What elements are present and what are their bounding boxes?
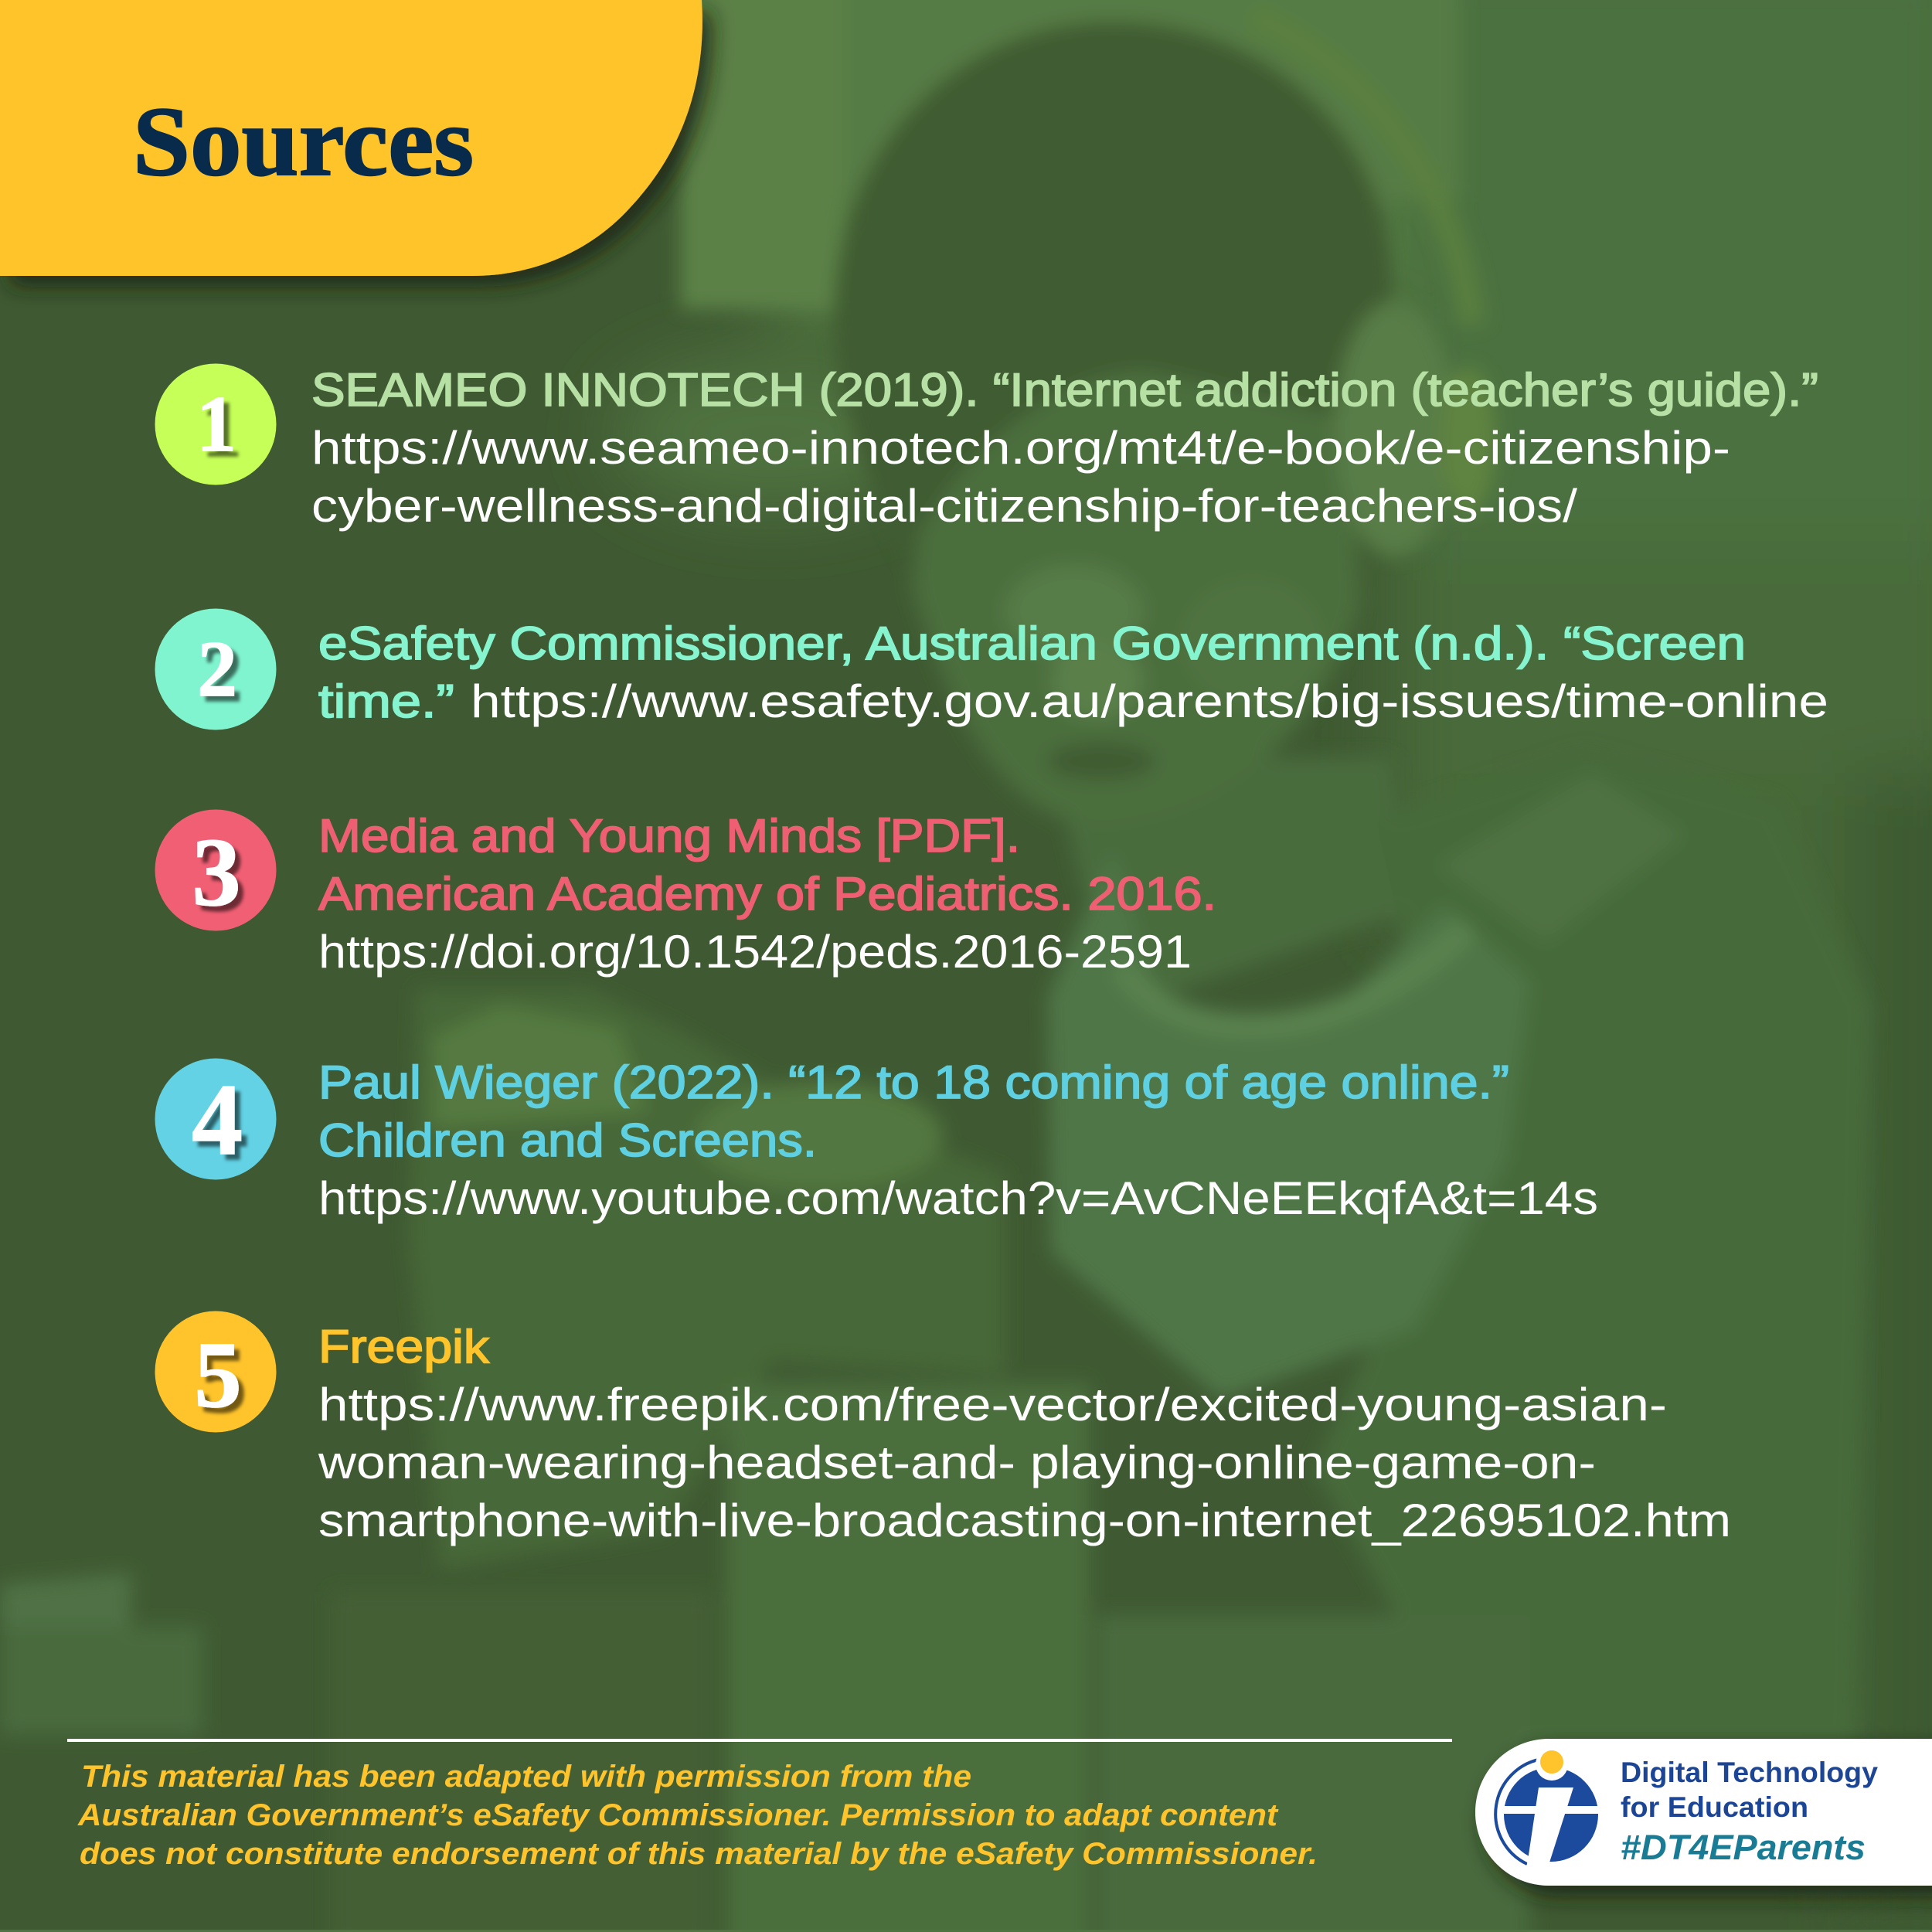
icon: DepEd i logo	[1495, 1748, 1604, 1866]
source 3 text: American Academy of Pediatrics. 2016.	[318, 868, 1216, 920]
disclaimer text: Australian Government’s eSafety Commissioner. Permission to adapt content	[77, 1798, 1279, 1832]
logo text: for Education	[1621, 1791, 1808, 1823]
number badge 2: 2	[197, 625, 237, 713]
logo pill	[1475, 1739, 1932, 1886]
source 2 text	[318, 617, 1828, 727]
number badge 3: 3	[192, 819, 241, 927]
logo text: Digital Technology	[1621, 1757, 1878, 1788]
source 1	[155, 363, 1818, 532]
neck	[1051, 757, 1406, 997]
source 3 text: https://doi.org/10.1542/peds.2016-2591	[318, 926, 1192, 978]
source 3 text: Media and Young Minds [PDF].	[318, 810, 1020, 862]
source 3 text	[318, 810, 1216, 978]
source 2 text: eSafety Commissioner, Australian Government (n.d.). “Screen	[318, 617, 1746, 669]
face	[912, 370, 1360, 827]
disclaimer text: does not constitute endorsement of this material by the eSafety Commissioner.	[80, 1837, 1318, 1871]
source 5 text	[318, 1321, 1731, 1546]
source 5 text: https://www.freepik.com/free-vector/excited-young-asian-	[318, 1379, 1667, 1430]
number badge 1: 1	[196, 380, 236, 468]
source 3	[155, 810, 1216, 978]
source 1 text	[311, 364, 1818, 532]
number badge 5	[155, 1311, 277, 1433]
number badge 4	[155, 1059, 277, 1179]
number badge 4: 4	[192, 1063, 243, 1176]
books	[0, 1573, 131, 1642]
number badge 1	[155, 363, 277, 485]
title: Sources	[133, 87, 474, 196]
hair	[834, 22, 1403, 572]
undershirt	[1048, 850, 1530, 1399]
number badge 5: 5	[195, 1323, 241, 1427]
source 1 text: https://www.seameo-innotech.org/mt4t/e-book/e-citizenship-	[311, 422, 1730, 474]
shirt	[1314, 750, 1870, 1747]
ear cup	[1335, 301, 1455, 556]
source 2	[155, 609, 1828, 730]
number badge 2	[155, 609, 277, 730]
disclaimer text	[77, 1760, 1318, 1871]
source 1 text: SEAMEO INNOTECH (2019). “Internet addiction (teacher’s guide).”	[311, 364, 1818, 416]
source 1 text: cyber-wellness-and-digital-citizenship-for-teachers-ios/	[311, 480, 1577, 532]
source 4 text: Children and Screens.	[318, 1114, 817, 1166]
source 4 text	[318, 1056, 1598, 1224]
logo text	[1621, 1757, 1878, 1867]
source 5 text: woman-wearing-headset-and- playing-online-game-on-	[318, 1437, 1596, 1488]
headphone band	[1252, 15, 1472, 325]
disclaimer text: This material has been adapted with permission from the	[81, 1760, 971, 1794]
title banner	[0, 0, 702, 276]
source 2 text: time.”	[318, 675, 454, 727]
source 4	[155, 1056, 1598, 1224]
logo text: #DT4EParents	[1621, 1828, 1866, 1867]
source 5 text: Freepik	[318, 1321, 490, 1372]
number badge 3	[155, 810, 277, 930]
source 4 text: https://www.youtube.com/watch?v=AvCNeEEkqfA&t=14s	[318, 1172, 1598, 1224]
source 4 text: Paul Wieger (2022). “12 to 18 coming of age online.”	[318, 1056, 1509, 1108]
mug / block	[726, 1383, 1090, 1932]
source 5 text: smartphone-with-live-broadcasting-on-internet_22695102.htm	[318, 1495, 1731, 1546]
arm and hand	[410, 989, 1005, 1569]
source 2 text: https://www.esafety.gov.au/parents/big-issues/time-online	[471, 675, 1828, 727]
source 5	[155, 1311, 1731, 1546]
